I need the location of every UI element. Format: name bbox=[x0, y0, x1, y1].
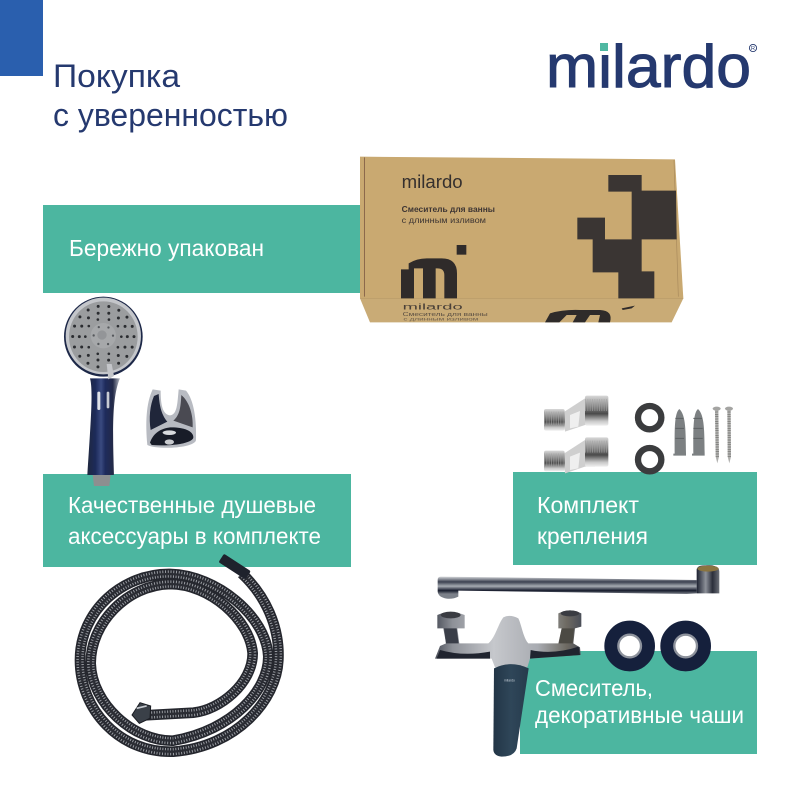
photo: mounting fittings bbox=[544, 396, 733, 473]
panel: shower accessories bbox=[43, 474, 351, 567]
panel: shower accessories: Качественные душевые bbox=[68, 492, 316, 518]
photo: shower head bbox=[64, 297, 143, 486]
photo: cardboard box: с длинным изливом bbox=[402, 216, 486, 225]
photo: decorative bowls bbox=[612, 628, 704, 664]
title: с уверенностью bbox=[53, 97, 288, 133]
photo: cardboard box: с длинным изливом bbox=[403, 317, 479, 323]
title bbox=[53, 58, 288, 133]
panel: carefully packed bbox=[43, 205, 363, 293]
photo: shower holder bracket bbox=[146, 389, 196, 448]
panel: mounting kit: Комплект bbox=[537, 492, 639, 518]
photo: mixer body bbox=[435, 610, 581, 757]
panel: mixer and bowls: Смеситель, bbox=[535, 675, 653, 701]
panel: shower accessories: аксессуары в комплекте bbox=[68, 523, 321, 549]
corner accent block bbox=[0, 0, 43, 76]
title: Покупка bbox=[53, 58, 180, 94]
photo: mixer body: milardo bbox=[504, 678, 515, 682]
photo: long spout bbox=[438, 565, 719, 599]
photo: cardboard box: Смеситель для ванны bbox=[402, 204, 495, 214]
photo: shower hose bbox=[80, 554, 278, 752]
panel: mounting kit bbox=[513, 472, 757, 565]
photo: cardboard box: milardo bbox=[402, 171, 463, 192]
photo: cardboard box: milardo bbox=[403, 302, 464, 311]
panel: mounting kit: крепления bbox=[537, 523, 648, 549]
photo: cardboard box: Смеситель для ванны bbox=[403, 312, 488, 318]
photo: cardboard box bbox=[360, 157, 683, 323]
panel: carefully packed: Бережно упакован bbox=[69, 235, 264, 261]
logo: milardo: milardo bbox=[546, 33, 751, 100]
panel: mixer and bowls bbox=[520, 651, 757, 754]
panel: mixer and bowls: декоративные чаши bbox=[535, 702, 744, 728]
logo: milardo: R bbox=[751, 46, 755, 52]
